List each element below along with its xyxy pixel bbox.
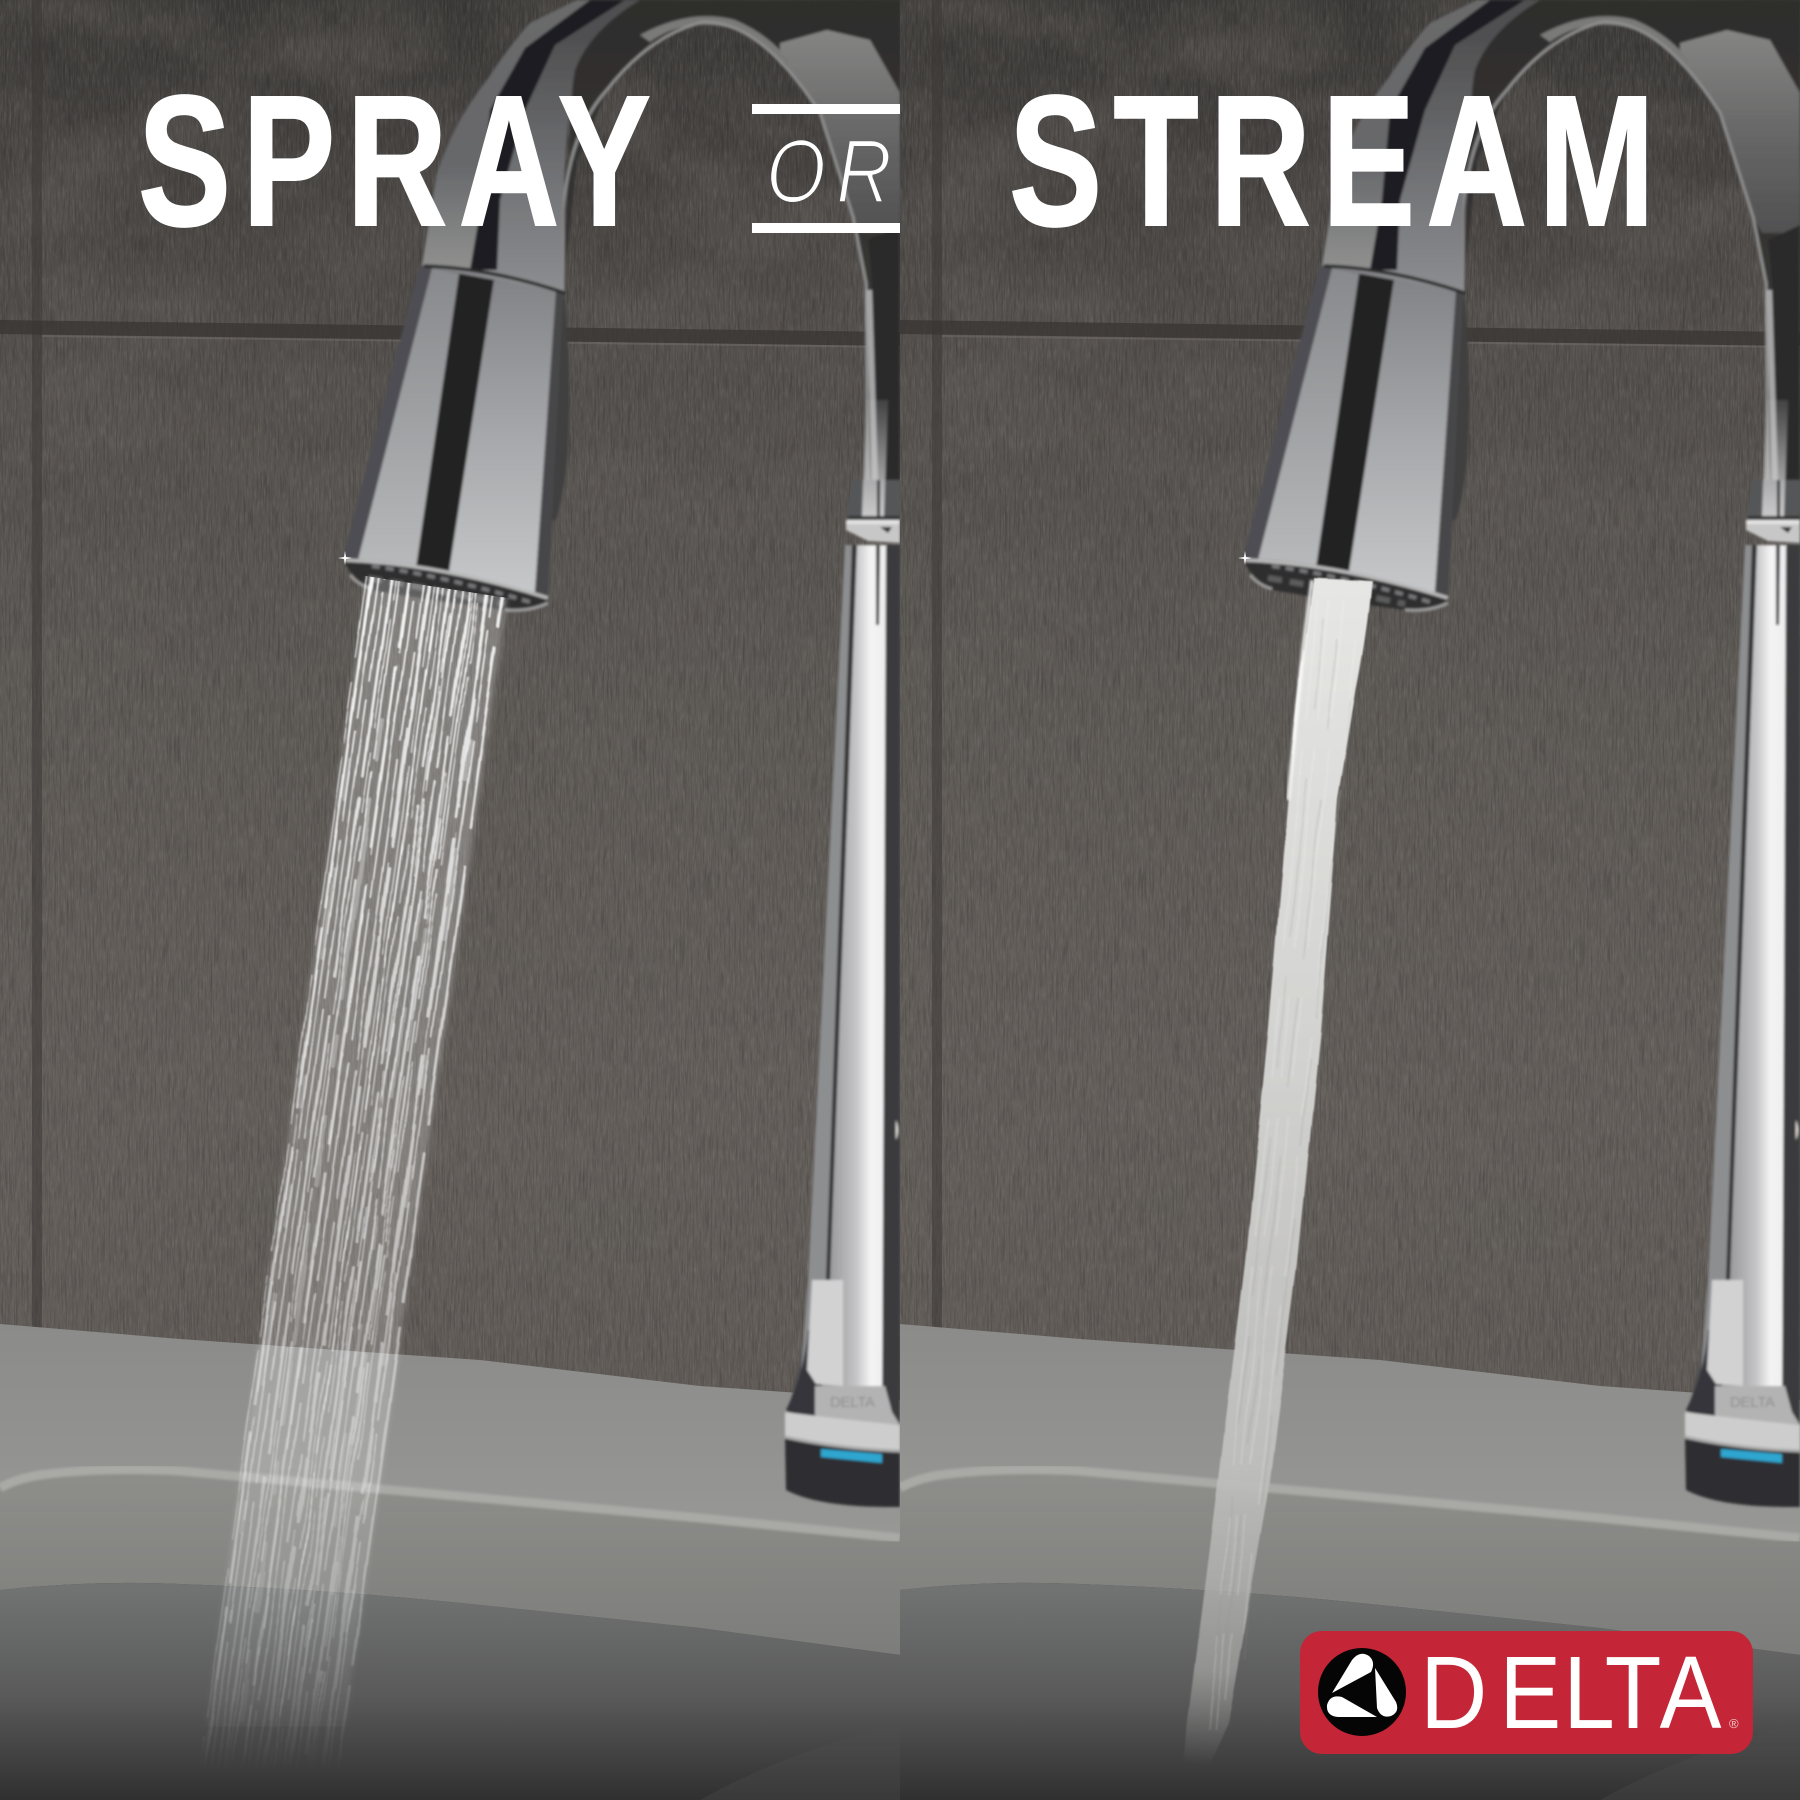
badge: OR: OR [766,122,902,222]
sparkle [338,551,352,565]
stream water [1184,577,1372,1770]
icon: Delta mark [1318,1648,1406,1736]
panel: spray photo background with faucet [0,0,900,1800]
spout neck [422,0,640,293]
faucet base [785,1280,900,1507]
blue indicator [821,1449,882,1463]
faucet [343,0,900,1507]
wordmark: DELTA [1420,1634,1722,1750]
panel: stream photo background with faucet [900,0,1800,1800]
badge: OR [752,104,902,233]
faucet stem [786,400,900,1440]
ring [785,1438,900,1507]
tile wall [0,0,900,1420]
spray head underside [343,558,548,610]
countertop [0,1324,900,1800]
title: SPRAY: SPRAY [138,58,662,265]
spray head nozzle [343,265,569,597]
logo: Delta: ® [1729,1716,1739,1731]
spray water [197,180,545,1790]
faucet arc upper chrome [563,0,900,480]
logo: Delta [1300,1631,1753,1754]
stem collar [846,516,900,543]
embossed brand mark: DELTA [830,1394,875,1411]
